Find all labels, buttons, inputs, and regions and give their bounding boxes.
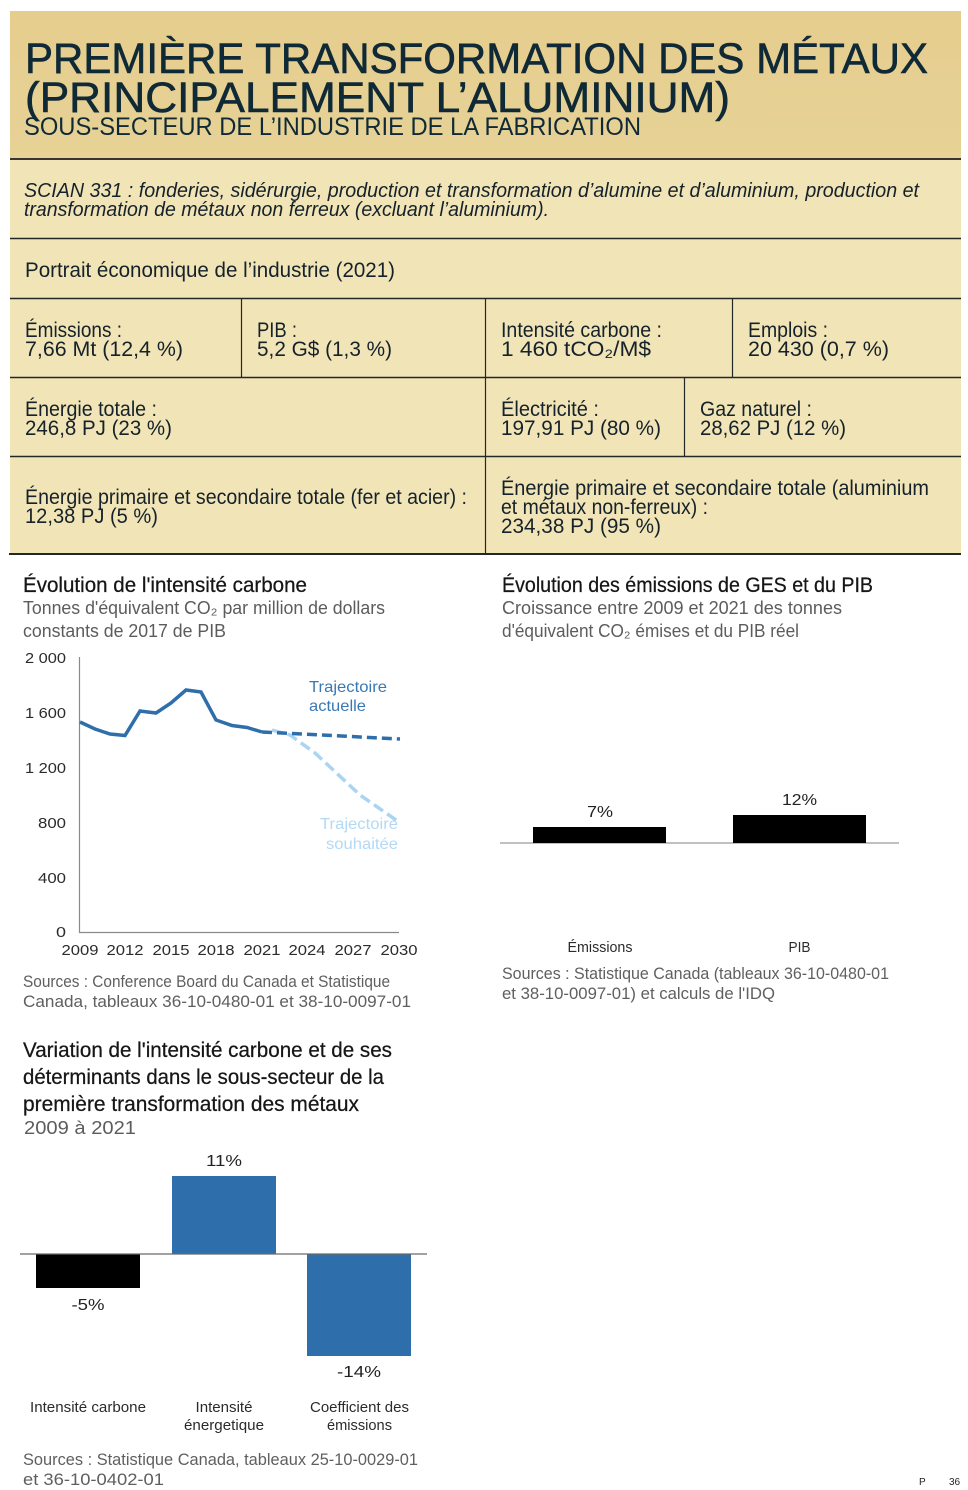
- period: 2009 à 2021: [24, 1118, 136, 1138]
- y axis labels: 400: [38, 871, 66, 887]
- bar: energy intensity: énergetique: [184, 1417, 264, 1434]
- bar: carbon intensity: -5%: [72, 1297, 104, 1314]
- bar: carbon intensity: [30, 1254, 146, 1416]
- x axis labels: 2027: [334, 943, 372, 959]
- panel: title banner: [10, 11, 961, 159]
- label: desired trajectory: Trajectoire: [320, 816, 398, 833]
- current trajectory dashed line: [262, 732, 400, 739]
- panel: carbon intensity chart: [23, 574, 418, 1011]
- title: PREMIÈRE TRANSFORMATION DES MÉTAUX: [25, 35, 928, 83]
- bar: energy intensity: 11%: [206, 1153, 242, 1170]
- bar: emission coefficient: [307, 1254, 411, 1434]
- heading: Évolution des émissions de GES et du PIB: [502, 574, 873, 597]
- cell: iron and steel energy: Énergie primaire et secondaire totale (fer et acier) :: [25, 486, 467, 509]
- cell: jobs: Emplois :: [748, 319, 828, 342]
- sources: Sources : Statistique Canada, tableaux 25-10-0029-01: [23, 1450, 418, 1469]
- label: desired trajectory: [320, 816, 398, 853]
- cell: GDP: 5,2 G$ (1,3 %): [257, 338, 392, 361]
- cell: total energy: Énergie totale :: [25, 398, 157, 421]
- cell: natural gas: Gaz naturel :: [700, 398, 812, 421]
- cell: natural gas: 28,62 PJ (12 %): [700, 417, 846, 440]
- cell: iron and steel energy: 12,38 PJ (5 %): [25, 505, 158, 528]
- description: [502, 598, 842, 641]
- description: [23, 598, 385, 641]
- x axis labels: 2024: [288, 943, 326, 959]
- sources: et 38-10-0097-01) et calculs de l'IDQ: [502, 984, 775, 1003]
- bar: energy intensity: Intensité: [196, 1399, 252, 1416]
- description: Croissance entre 2009 et 2021 des tonnes: [502, 598, 842, 618]
- cell: jobs: 20 430 (0,7 %): [748, 338, 889, 361]
- sources: Sources : Conference Board du Canada et Statistique: [23, 972, 390, 991]
- SCIAN description: [24, 180, 920, 221]
- panel: carbon intensity determinants chart: [20, 1039, 427, 1489]
- y axis labels: 1 600: [25, 706, 66, 722]
- cell: emissions: Émissions :: [25, 319, 122, 342]
- title: [25, 35, 928, 122]
- subtitle: SOUS-SECTEUR DE L’INDUSTRIE DE LA FABRICATION: [24, 113, 641, 141]
- cell: jobs: [748, 319, 889, 361]
- x axis labels: [62, 943, 418, 959]
- bar: emissions: [533, 804, 666, 956]
- bar: GDP: 12%: [782, 792, 817, 809]
- cell: electricity: [501, 398, 661, 440]
- bar: energy intensity: [172, 1153, 276, 1434]
- y axis labels: 2 000: [25, 651, 66, 667]
- cell: aluminium energy: et métaux non-ferreux) :: [501, 496, 708, 519]
- description: d'équivalent CO₂ émises et du PIB réel: [502, 621, 799, 641]
- bar: emission coefficient: Coefficient des: [310, 1399, 409, 1416]
- bar: emission coefficient: émissions: [327, 1417, 392, 1434]
- heading: Variation de l'intensité carbone et de ses: [23, 1039, 392, 1062]
- page number: [919, 1477, 961, 1488]
- bar: GDP: [733, 792, 866, 956]
- label: current trajectory: [309, 679, 387, 715]
- sources: Canada, tableaux 36-10-0480-01 et 38-10-0097-01: [23, 992, 411, 1011]
- panel: economic portrait table: [9, 159, 961, 554]
- cell: emissions: [25, 319, 183, 361]
- heading: Évolution de l'intensité carbone: [23, 574, 307, 597]
- cell: emissions: 7,66 Mt (12,4 %): [25, 338, 183, 361]
- label: current trajectory: Trajectoire: [309, 679, 387, 696]
- description: constants de 2017 de PIB: [23, 621, 226, 641]
- cell: carbon intensity: [501, 319, 662, 361]
- sources: Sources : Statistique Canada (tableaux 36-10-0480-01: [502, 964, 889, 983]
- x axis labels: 2021: [244, 943, 280, 959]
- y axis labels: 0: [56, 925, 66, 941]
- bar: GDP: PIB: [788, 939, 810, 956]
- y axis labels: [25, 651, 66, 941]
- cell: aluminium energy: 234,38 PJ (95 %): [501, 515, 661, 538]
- historical carbon intensity line: [80, 690, 262, 736]
- title: (PRINCIPALEMENT L’ALUMINIUM): [25, 74, 730, 122]
- heading: [23, 1039, 392, 1116]
- bar: emissions: 7%: [587, 804, 613, 821]
- x axis labels: 2015: [152, 943, 190, 959]
- sources: et 36-10-0402-01: [23, 1470, 164, 1489]
- SCIAN description: transformation de métaux non ferreux (excluant l’aluminium).: [24, 199, 549, 221]
- bar: emissions: Émissions: [568, 939, 632, 956]
- cell: iron and steel energy: [25, 486, 467, 528]
- bar: carbon intensity: Intensité carbone: [30, 1399, 146, 1416]
- label: current trajectory: actuelle: [309, 698, 366, 715]
- cell: total energy: [25, 398, 172, 440]
- cell: GDP: PIB :: [257, 319, 297, 342]
- cell: total energy: 246,8 PJ (23 %): [25, 417, 172, 440]
- cell: GDP: [257, 319, 392, 361]
- portrait heading: Portrait économique de l’industrie (2021): [25, 259, 395, 282]
- page number: P: [919, 1477, 926, 1488]
- heading: première transformation des métaux: [23, 1093, 359, 1116]
- y axis labels: 1 200: [25, 761, 66, 777]
- SCIAN description: SCIAN 331 : fonderies, sidérurgie, production et transformation d’alumine et d’aluminium, production et: [24, 180, 920, 202]
- cell: carbon intensity: 1 460 tCO₂/M$: [501, 338, 651, 361]
- x axis labels: 2012: [106, 943, 144, 959]
- cell: aluminium energy: Énergie primaire et secondaire totale (aluminium: [501, 477, 929, 500]
- heading: déterminants dans le sous-secteur de la: [23, 1066, 384, 1089]
- x axis labels: 2009: [62, 943, 98, 959]
- bar: emission coefficient: -14%: [337, 1364, 381, 1381]
- y axis labels: 800: [38, 816, 66, 832]
- x axis labels: 2030: [380, 943, 418, 959]
- panel: emissions and GDP chart: [500, 574, 899, 1003]
- cell: electricity: 197,91 PJ (80 %): [501, 417, 661, 440]
- sources: [23, 972, 411, 1011]
- x axis labels: 2018: [198, 943, 234, 959]
- cell: natural gas: [700, 398, 846, 440]
- label: desired trajectory: souhaitée: [326, 836, 398, 853]
- cell: electricity: Électricité :: [501, 398, 599, 421]
- cell: aluminium energy: [501, 477, 929, 538]
- desired trajectory line: [272, 730, 399, 822]
- sources: [502, 964, 889, 1003]
- page number: 36: [949, 1477, 961, 1488]
- cell: carbon intensity: Intensité carbone :: [501, 319, 662, 342]
- description: Tonnes d'équivalent CO₂ par million de dollars: [23, 598, 385, 618]
- sources: [23, 1450, 418, 1489]
